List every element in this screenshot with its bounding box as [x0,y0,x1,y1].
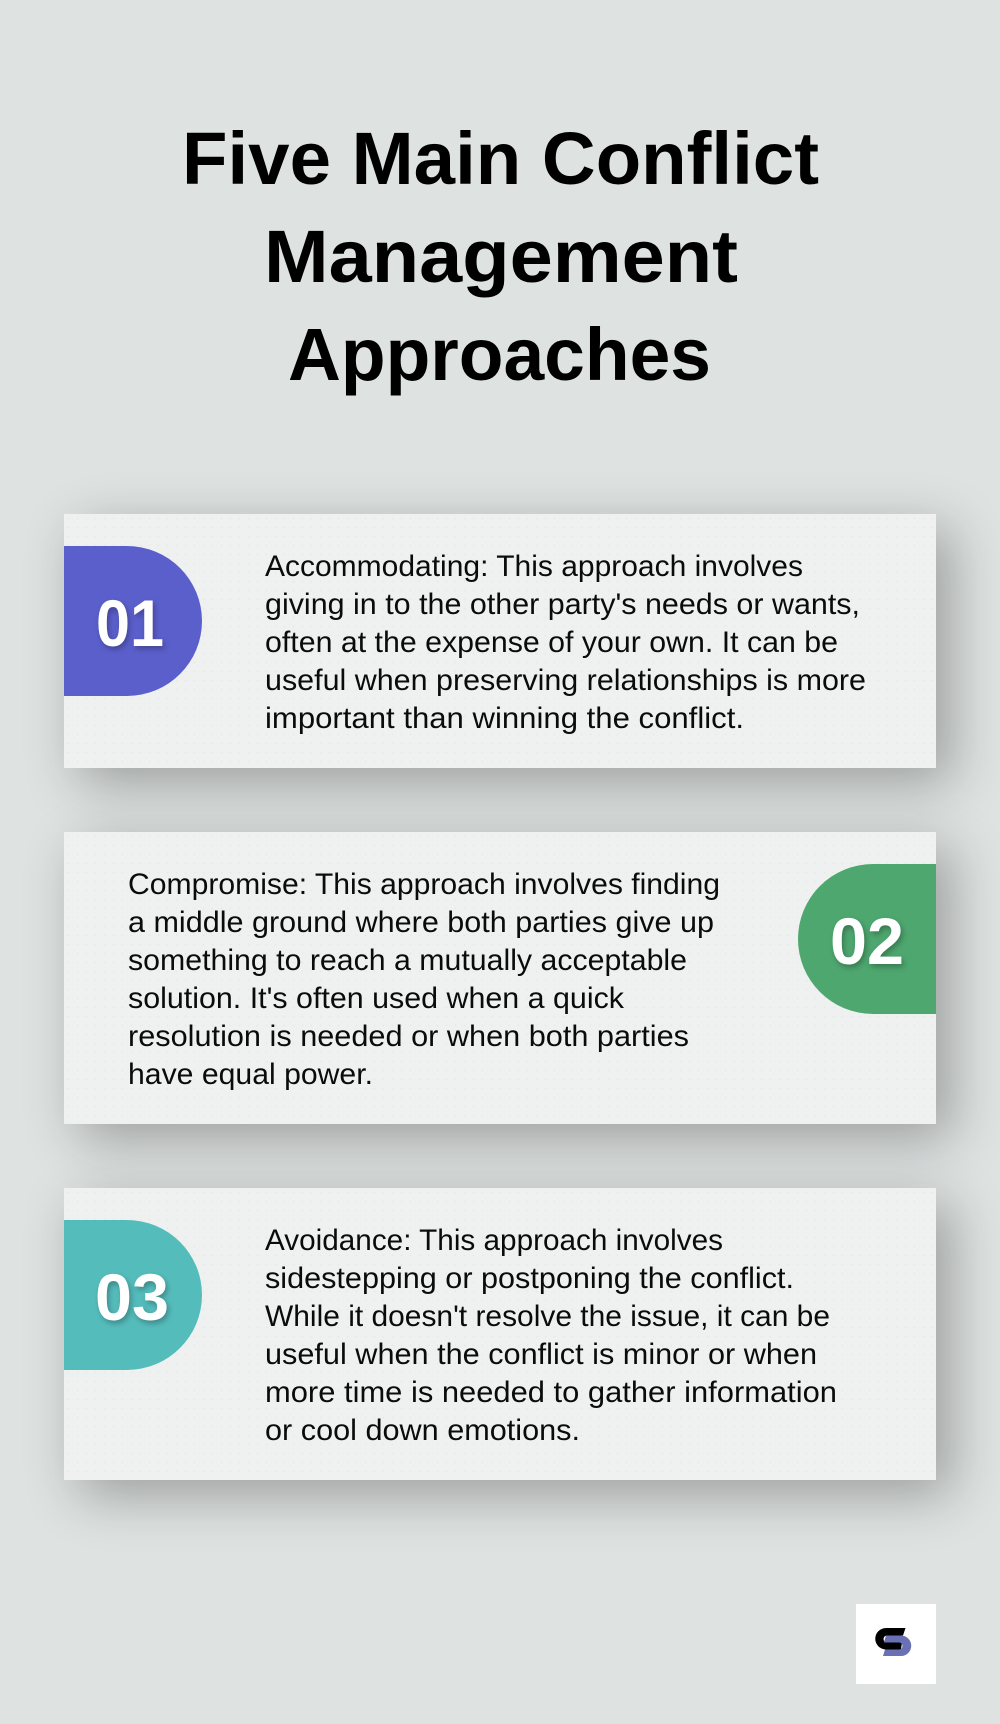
panel: avoidance [64,1188,936,1480]
text: accommodating description: often at the expense of your own. It can be [265,626,838,659]
text: accommodating description [265,550,866,735]
text: avoidance description: sidestepping or postponing the conflict. [265,1262,794,1295]
text: accommodating description: useful when preserving relationships is more [265,664,866,697]
title: Approaches [288,313,711,396]
title: Five Main Conflict [182,117,819,200]
logo [856,1604,936,1684]
text: avoidance description: Avoidance: This approach involves [265,1224,723,1257]
badge: 01 [64,546,202,696]
text: accommodating description: giving in to the other party's needs or wants, [265,588,860,621]
panel: compromise [64,832,936,1124]
text: avoidance description [265,1224,837,1447]
text: compromise description: Compromise: This approach involves finding [128,868,720,901]
number: 02: 02 [830,904,904,978]
title: Management [264,215,738,298]
badge: 02 [798,864,936,1014]
badge: 03 [64,1220,202,1370]
text: compromise description: resolution is needed or when both parties [128,1020,689,1053]
text: avoidance description: useful when the conflict is minor or when [265,1338,817,1371]
text: avoidance description: or cool down emotions. [265,1414,580,1447]
number: 01: 01 [96,586,164,660]
text: compromise description: solution. It's often used when a quick [128,982,624,1015]
text: compromise description [128,868,720,1091]
text: accommodating description: important than winning the conflict. [265,702,744,735]
text: compromise description: have equal power. [128,1058,373,1091]
text: accommodating description: Accommodating: This approach involves [265,550,803,583]
title [182,117,819,396]
text: compromise description: something to reach a mutually acceptable [128,944,687,977]
number: 03: 03 [95,1260,169,1334]
text: compromise description: a middle ground where both parties give up [128,906,714,939]
text: avoidance description: While it doesn't resolve the issue, it can be [265,1300,830,1333]
text: avoidance description: more time is needed to gather information [265,1376,837,1409]
icon: logo mark [875,1628,912,1656]
panel: accommodating [64,514,936,768]
